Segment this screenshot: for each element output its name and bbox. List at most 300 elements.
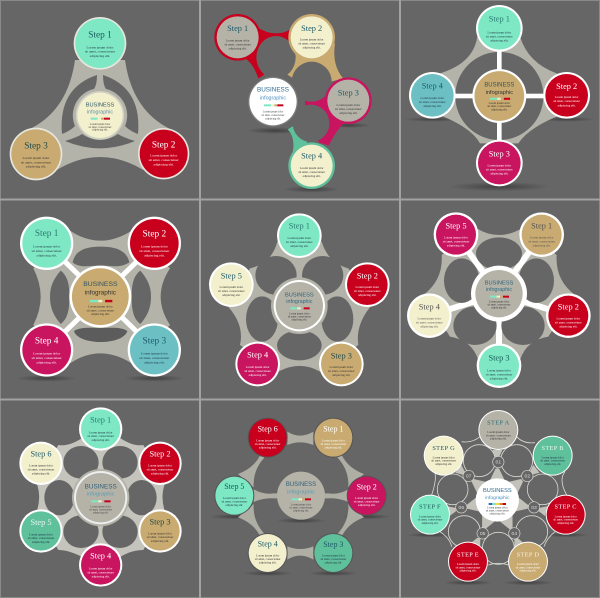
step 1: [313, 418, 353, 458]
step 2: Lorem ipsum dolor: [556, 317, 580, 321]
step 4: sit amet, consectetuer: [419, 100, 446, 105]
step 1: Lorem ipsum dolor: [287, 236, 311, 240]
step 2: sit amet, consectetuer: [555, 321, 582, 326]
step 6: [19, 442, 63, 485]
step 3: adipiscing elit.: [151, 539, 169, 543]
step 1: Step 1: [227, 24, 248, 33]
hub: sit amet, consectetuer: [262, 114, 285, 117]
step 5: [214, 476, 254, 516]
hub: infographic: [287, 489, 315, 495]
hub: sit amet, consectetuer: [288, 316, 311, 319]
step 1: Lorem ipsum dolor: [487, 30, 511, 34]
hub: BUSINESS: [286, 482, 316, 488]
step 4: adipiscing elit.: [303, 174, 321, 178]
step 3: Step 3: [488, 354, 510, 363]
step 4: [407, 293, 452, 338]
panel: four steps square: [17, 217, 184, 382]
connector band: [440, 37, 557, 143]
step 2: sit amet, consectetuer: [354, 289, 381, 294]
step 2: [546, 293, 591, 338]
step 2: adipiscing elit.: [303, 46, 321, 50]
step 1: [277, 213, 322, 258]
step 3: sit amet, consectetuer: [21, 160, 52, 165]
step 6: Lorem ipsum dolor: [29, 464, 53, 468]
step 4: Step 4: [247, 351, 269, 360]
step G: Lorem ipsum dolor: [433, 455, 455, 459]
step 2: [138, 442, 182, 485]
panel: seven steps A to G: [407, 410, 589, 585]
step B: Lorem ipsum dolor: [542, 455, 564, 459]
step 4: Step 4: [90, 552, 112, 561]
step 2: adipiscing elit.: [559, 325, 578, 329]
step D: adipiscing elit.: [520, 569, 537, 573]
step 2: [288, 14, 335, 61]
step 2: Step 2: [152, 140, 176, 150]
step 4: sit amet, consectetuer: [32, 356, 63, 361]
step 2: Step 2: [143, 230, 166, 240]
step 2: adipiscing elit.: [153, 162, 174, 166]
step 5: sit amet, consectetuer: [218, 289, 245, 294]
step 4: Step 4: [419, 302, 441, 311]
hub: [248, 77, 298, 127]
step B: adipiscing elit.: [544, 462, 561, 466]
step 1: Step 1: [90, 416, 111, 425]
step 2: Step 2: [301, 24, 322, 33]
step 3: sit amet, consectetuer: [335, 107, 362, 112]
hub: [473, 268, 525, 320]
step 3: Step 3: [331, 351, 352, 360]
panel: four steps cross: [404, 5, 595, 191]
hub: [277, 472, 325, 520]
step F: STEP F: [419, 504, 441, 511]
step 4: Lorem ipsum dolor: [417, 317, 441, 321]
step 1: [20, 217, 73, 270]
step 5: Step 5: [30, 518, 52, 527]
step 4: adipiscing elit.: [423, 104, 442, 108]
step 3: Lorem ipsum dolor: [23, 156, 50, 160]
hub: BUSINESS: [83, 281, 118, 288]
step 4: sit amet, consectetuer: [255, 557, 281, 562]
hub: BUSINESS: [257, 87, 289, 94]
hub: infographic: [87, 110, 113, 116]
step D: Lorem ipsum dolor: [517, 562, 539, 566]
connector band: [30, 60, 170, 170]
hub: Lorem ipsum dolor: [489, 301, 509, 304]
step 5: Lorem ipsum dolor: [29, 532, 53, 536]
hub: [76, 91, 124, 140]
step F: Lorem ipsum dolor: [419, 514, 441, 518]
hub: adipiscing elit.: [91, 312, 110, 316]
step 3: sit amet, consectetuer: [328, 369, 355, 374]
hub: BUSINESS: [484, 83, 514, 89]
step 4: [79, 543, 122, 587]
step 2: [347, 476, 387, 516]
step 1: sit amet, consectetuer: [87, 434, 114, 439]
step 6: adipiscing elit.: [259, 446, 277, 450]
step 3: [476, 140, 523, 186]
step 2: sit amet, consectetuer: [147, 467, 173, 472]
step 4: [235, 342, 280, 386]
step 3: adipiscing elit.: [26, 165, 46, 169]
step 2: [345, 262, 390, 307]
step 3: adipiscing elit.: [490, 172, 509, 176]
step C: [546, 495, 586, 535]
step 2: Step 2: [558, 302, 579, 311]
step 2: adipiscing elit.: [151, 471, 169, 475]
badge numbers: [459, 460, 537, 537]
step 1: sit amet, consectetuer: [486, 34, 513, 39]
step 1: Step 1: [323, 425, 343, 434]
step 4: Lorem ipsum dolor: [256, 554, 279, 558]
step 3: sit amet, consectetuer: [147, 535, 173, 540]
step 2: [128, 217, 181, 270]
step 4: Step 4: [301, 152, 323, 161]
step 2: adipiscing elit.: [358, 293, 377, 297]
hub: Lorem ipsum dolor: [88, 305, 114, 309]
step 6: sit amet, consectetuer: [28, 467, 54, 472]
step C: adipiscing elit.: [557, 521, 574, 525]
step 3: [477, 343, 521, 388]
hub: infographic: [485, 495, 510, 501]
hub: adipiscing elit.: [265, 118, 281, 121]
step 1: Step 1: [88, 31, 112, 41]
step E: sit amet, consectetuer: [456, 565, 480, 569]
step A: [478, 410, 518, 450]
step 3: sit amet, consectetuer: [320, 557, 346, 562]
hub: Lorem ipsum dolor: [289, 313, 310, 316]
step 3: Lorem ipsum dolor: [336, 103, 360, 107]
hub: adipiscing elit.: [490, 513, 505, 516]
step 2: Step 2: [149, 450, 171, 459]
step D: sit amet, consectetuer: [516, 565, 540, 569]
panel: six steps ring: [209, 418, 392, 576]
step F: adipiscing elit.: [422, 521, 439, 525]
step 5: Lorem ipsum dolor: [219, 285, 243, 289]
step 1: sit amet, consectetuer: [224, 43, 251, 48]
step 2: sit amet, consectetuer: [149, 158, 180, 163]
step 3: sit amet, consectetuer: [486, 168, 513, 173]
step B: sit amet, consectetuer: [540, 459, 565, 463]
step 2: Step 2: [556, 82, 577, 91]
hub: sit amet, consectetuer: [290, 506, 313, 509]
step 4: [409, 72, 456, 119]
hub: adipiscing elit.: [491, 307, 507, 310]
step 3: Lorem ipsum dolor: [322, 554, 345, 558]
step 2: Lorem ipsum dolor: [150, 154, 178, 158]
hub: infographic: [286, 299, 313, 305]
step 4: Lorem ipsum dolor: [300, 166, 324, 170]
tan connector: [276, 43, 343, 82]
step 1: [519, 212, 564, 257]
hub: BUSINESS: [483, 488, 512, 494]
connectors: [238, 432, 364, 560]
step A: STEP A: [487, 420, 510, 427]
step 1: Lorem ipsum dolor: [33, 245, 61, 249]
step 2: Lorem ipsum dolor: [555, 95, 579, 99]
step 3: [138, 509, 182, 553]
step 5: adipiscing elit.: [222, 293, 241, 297]
step 3: Step 3: [323, 540, 343, 549]
panel: five steps inverted pentagon: [407, 212, 591, 388]
hub: adipiscing elit.: [92, 129, 108, 132]
step 3: Lorem ipsum dolor: [148, 531, 172, 535]
step G: [424, 436, 464, 476]
step 1: [74, 17, 126, 70]
step 1: adipiscing elit.: [229, 47, 247, 51]
shadows: [17, 375, 184, 382]
step 1: Lorem ipsum dolor: [530, 236, 554, 240]
step 2: sit amet, consectetuer: [139, 249, 170, 254]
step E: STEP E: [457, 551, 479, 558]
hub: Lorem ipsum dolor: [487, 507, 508, 510]
step 1: Step 1: [35, 229, 59, 239]
step 1: Lorem ipsum dolor: [89, 430, 113, 434]
step 3: Step 3: [338, 88, 359, 97]
hub: infographic: [260, 95, 286, 101]
step A: sit amet, consectetuer: [486, 433, 511, 437]
step 3: sit amet, consectetuer: [486, 373, 512, 378]
step B: [533, 436, 573, 476]
badge numbers: 04: [512, 531, 517, 537]
step 4: [20, 323, 73, 377]
hub: [472, 69, 526, 123]
step 6: sit amet, consectetuer: [255, 442, 281, 447]
step 1: adipiscing elit.: [325, 446, 342, 450]
step 3: Lorem ipsum dolor: [329, 365, 353, 369]
panel: three steps: [10, 17, 189, 180]
step 6: Step 6: [30, 450, 52, 459]
step 6: adipiscing elit.: [32, 471, 50, 475]
step 5: adipiscing elit.: [447, 244, 465, 248]
step 3: Lorem ipsum dolor: [487, 164, 511, 168]
panel: four steps linked: [214, 14, 372, 193]
step 2: Lorem ipsum dolor: [355, 496, 378, 500]
step 1: adipiscing elit.: [290, 244, 309, 248]
step 1: Step 1: [489, 15, 510, 24]
step 1: Step 1: [289, 222, 310, 231]
step A: Lorem ipsum dolor: [487, 430, 509, 434]
step 1: adipiscing elit.: [533, 244, 551, 248]
step 1: sit amet, consectetuer: [32, 249, 63, 254]
hub: infographic: [87, 492, 115, 498]
step 3: adipiscing elit.: [325, 561, 342, 565]
spokes: [447, 450, 548, 549]
hub: sit amet, consectetuer: [486, 510, 509, 513]
hub: [74, 471, 127, 524]
hub: sit amet, consectetuer: [87, 308, 115, 313]
step 2: Lorem ipsum dolor: [148, 464, 172, 468]
step 5: [209, 262, 254, 307]
hub: Lorem ipsum dolor: [291, 503, 311, 506]
step E: adipiscing elit.: [460, 569, 477, 573]
step B: STEP B: [541, 445, 564, 452]
step 3: [128, 323, 181, 377]
step 5: sit amet, consectetuer: [28, 536, 54, 541]
step 2: sit amet, consectetuer: [354, 499, 380, 504]
badge numbers: 02: [525, 474, 530, 480]
badge numbers: 06: [459, 505, 464, 511]
panel: five steps pentagon: [209, 213, 390, 386]
hub: sit amet, consectetuer: [89, 126, 112, 129]
hub: adipiscing elit.: [491, 108, 508, 111]
step G: STEP G: [432, 445, 455, 452]
hub: Lorem ipsum dolor: [90, 123, 110, 126]
step D: STEP D: [517, 551, 539, 558]
step 4: sit amet, consectetuer: [416, 321, 443, 326]
step 4: Step 4: [422, 81, 444, 90]
step 5: [19, 509, 63, 553]
hub: [69, 266, 131, 328]
hub: BUSINESS: [485, 280, 514, 286]
step 5: Step 5: [221, 271, 242, 280]
step 2: sit amet, consectetuer: [553, 99, 580, 104]
step 2: [138, 128, 189, 179]
hub: Lorem ipsum dolor: [263, 110, 283, 113]
step 1: sit amet, consectetuer: [320, 442, 346, 447]
magenta connector: [305, 82, 347, 145]
connector band: [37, 438, 165, 557]
step 3: adipiscing elit.: [332, 373, 351, 377]
hub: infographic: [486, 287, 512, 293]
hub: BUSINESS: [285, 292, 314, 298]
step 3: sit amet, consectetuer: [139, 356, 170, 361]
step 3: adipiscing elit.: [339, 111, 358, 115]
step G: adipiscing elit.: [435, 462, 452, 466]
hub: BUSINESS: [86, 103, 115, 109]
step 4: adipiscing elit.: [36, 361, 57, 365]
step F: [410, 495, 450, 535]
step 2: adipiscing elit.: [144, 254, 165, 258]
step F: sit amet, consectetuer: [418, 518, 442, 522]
step G: sit amet, consectetuer: [431, 459, 456, 463]
step 5: Lorem ipsum dolor: [444, 236, 468, 240]
hub: infographic: [486, 90, 513, 96]
step 4: Step 4: [258, 540, 278, 549]
step 1: sit amet, consectetuer: [286, 240, 313, 245]
red connector: [245, 27, 291, 78]
number badges: [456, 456, 540, 539]
badge numbers: 03: [531, 505, 537, 511]
badge numbers: 01: [496, 460, 501, 466]
connector band: [225, 242, 373, 372]
step 2: [543, 72, 590, 119]
step 1: adipiscing elit.: [92, 438, 110, 442]
step 1: adipiscing elit.: [36, 254, 57, 258]
step 2: Lorem ipsum dolor: [141, 245, 169, 249]
step 5: Step 5: [445, 221, 467, 230]
step 4: adipiscing elit.: [249, 373, 267, 377]
hub: sit amet, consectetuer: [89, 509, 112, 512]
step 3: Lorem ipsum dolor: [487, 369, 511, 373]
step 3: Step 3: [149, 517, 171, 526]
step 5: Step 5: [224, 482, 244, 491]
step 4: sit amet, consectetuer: [87, 570, 114, 575]
step 3: [325, 77, 372, 124]
badge numbers: 07: [466, 474, 472, 480]
hub: [476, 478, 519, 522]
step 1: Lorem ipsum dolor: [322, 439, 345, 443]
step 4: sit amet, consectetuer: [298, 170, 325, 175]
step 5: sit amet, consectetuer: [443, 240, 469, 245]
step 1: Lorem ipsum dolor: [226, 39, 250, 43]
badge numbers: 05: [480, 531, 486, 537]
step 1: [79, 407, 122, 451]
step C: Lorem ipsum dolor: [555, 514, 577, 518]
hub: adipiscing elit.: [293, 509, 309, 512]
step 4: Lorem ipsum dolor: [246, 365, 270, 369]
step 5: adipiscing elit.: [32, 540, 50, 544]
step 1: [476, 5, 523, 52]
step 3: [10, 128, 62, 180]
step 2: Step 2: [357, 272, 378, 281]
step 4: sit amet, consectetuer: [244, 369, 271, 374]
ring holes: [256, 36, 332, 142]
step 6: [248, 418, 288, 458]
step 1: adipiscing elit.: [490, 38, 509, 42]
step 2: adipiscing elit.: [358, 503, 376, 507]
step 2: Lorem ipsum dolor: [355, 285, 379, 289]
step 2: Step 2: [357, 483, 377, 492]
step 2: adipiscing elit.: [558, 103, 576, 107]
step 1: [214, 14, 261, 61]
step 5: [434, 212, 478, 257]
hub: infographic: [85, 289, 117, 296]
hub: sit amet, consectetuer: [488, 304, 511, 307]
step 4: Step 4: [35, 336, 59, 346]
step 4: Lorem ipsum dolor: [33, 352, 61, 356]
step A: adipiscing elit.: [490, 437, 507, 441]
step E: [448, 542, 488, 582]
step 4: [248, 533, 288, 573]
hub: adipiscing elit.: [93, 512, 109, 515]
panel: six steps: [19, 407, 182, 587]
step 1: Step 1: [531, 221, 552, 230]
step 5: Lorem ipsum dolor: [223, 496, 246, 500]
hub: adipiscing elit.: [292, 319, 307, 322]
step 3: [313, 533, 353, 573]
shadows: [209, 514, 392, 576]
hub: sit amet, consectetuer: [487, 105, 511, 108]
shadows: [404, 117, 595, 191]
step D: [508, 542, 548, 582]
shadows: [407, 533, 589, 585]
step C: sit amet, consectetuer: [553, 518, 578, 522]
hub: BUSINESS: [85, 483, 117, 490]
connector band: [423, 228, 575, 366]
hub: [274, 280, 325, 331]
thin ring arcs: [432, 437, 567, 565]
step 1: Lorem ipsum dolor: [87, 45, 114, 49]
step 3: Step 3: [143, 336, 166, 346]
hub: Lorem ipsum dolor: [90, 506, 111, 509]
step 1: sit amet, consectetuer: [85, 50, 116, 55]
step 3: Step 3: [489, 150, 510, 159]
connector band: [33, 231, 170, 363]
step 3: adipiscing elit.: [490, 376, 508, 380]
step 4: Lorem ipsum dolor: [89, 567, 113, 571]
step 4: adipiscing elit.: [92, 574, 110, 578]
shadows: [247, 123, 372, 193]
hub: Lorem ipsum dolor: [489, 102, 510, 105]
step 5: sit amet, consectetuer: [221, 499, 247, 504]
step 6: Lorem ipsum dolor: [256, 439, 279, 443]
step 3: [319, 342, 364, 386]
step 3: Step 3: [24, 141, 48, 151]
step 4: adipiscing elit.: [259, 561, 277, 565]
step 1: adipiscing elit.: [90, 54, 110, 58]
step 3: adipiscing elit.: [144, 361, 165, 365]
step C: STEP C: [554, 504, 577, 511]
